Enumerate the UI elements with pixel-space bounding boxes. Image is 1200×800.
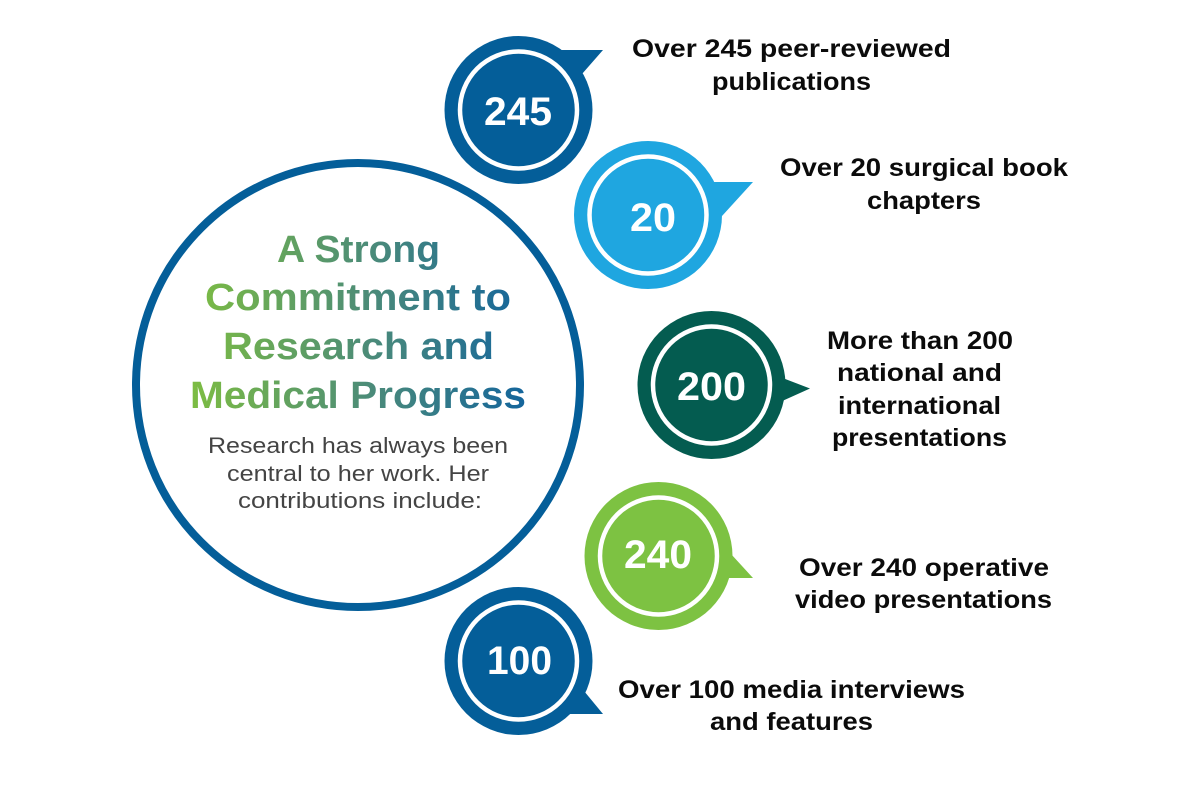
badge: 100: [444, 587, 603, 735]
label: 245 publications: Over 245 peer-reviewed: [632, 35, 951, 63]
badge: 20: [574, 141, 753, 289]
title: A Strong: [277, 229, 440, 271]
intro text: central to her work. Her: [227, 461, 489, 486]
badge: 240: [584, 482, 753, 630]
badge: 20: 20: [630, 196, 676, 240]
label: 240 video presentations: [795, 554, 1052, 614]
badge: 100: 100: [487, 639, 552, 683]
label: 200 presentations: international: [838, 392, 1001, 420]
title: Research and: [223, 326, 494, 368]
label: 200 presentations: national and: [837, 359, 1002, 387]
label: 100 media interviews: Over 100 media interviews: [618, 676, 965, 704]
intro text: [208, 433, 508, 513]
badge: 200: 200: [677, 365, 746, 409]
intro text: contributions include:: [238, 488, 482, 513]
title: Medical Progress: [190, 375, 526, 417]
label: 200 presentations: More than 200: [827, 327, 1013, 355]
label: 200 presentations: [827, 327, 1013, 452]
title: [190, 229, 526, 417]
panel: central circle: [136, 163, 580, 607]
label: 200 presentations: presentations: [832, 424, 1007, 452]
label: 100 media interviews: [618, 676, 965, 736]
title: Commitment to: [205, 277, 511, 319]
badge: 200: [638, 311, 810, 459]
badge: 245: [444, 36, 603, 184]
label: 245 publications: [632, 35, 951, 96]
intro text: Research has always been: [208, 433, 508, 458]
badge: 245: 245: [484, 90, 552, 134]
label: 20 book chapters: chapters: [867, 187, 981, 215]
label: 240 video presentations: video presentations: [795, 586, 1052, 614]
label: 240 video presentations: Over 240 operative: [799, 554, 1049, 582]
label: 245 publications: publications: [712, 68, 871, 96]
badge: 240: 240: [624, 533, 692, 577]
label: 100 media interviews: and features: [710, 708, 873, 736]
label: 20 book chapters: [780, 154, 1068, 215]
label: 20 book chapters: Over 20 surgical book: [780, 154, 1068, 182]
